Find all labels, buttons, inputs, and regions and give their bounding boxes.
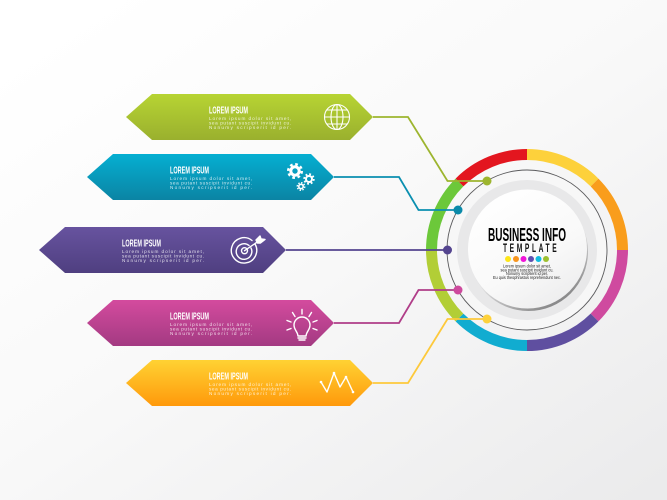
- center body text: [493, 264, 561, 280]
- panel: banner 3 purple: [39, 227, 286, 273]
- icon: globe: [324, 104, 350, 130]
- body text: sea putant suscipit invidunt cu.: [209, 386, 291, 392]
- inner white disc: [468, 190, 587, 308]
- body text: Nonumy scripserit id per.: [122, 258, 204, 263]
- body text: sea putant suscipit invidunt cu.: [209, 120, 291, 126]
- icon: zigzag chart: [320, 372, 354, 393]
- center body text: Eu quis theophrastus reprehendunt nec.: [493, 275, 561, 280]
- heading: LOREM IPSUM: [209, 104, 248, 116]
- body text: sea putant suscipit invidunt cu.: [170, 180, 252, 186]
- body text: [209, 382, 291, 396]
- body text: Nonumy scripserit id per.: [209, 125, 291, 130]
- body text: [170, 322, 252, 336]
- center subtitle: TEMPLATE: [503, 241, 559, 254]
- connector 3: [286, 246, 452, 254]
- body text: sea putant suscipit invidunt cu.: [122, 254, 204, 258]
- outer segmented ring: [432, 154, 623, 346]
- center body text: Lorem ipsum dolor sit amet,: [503, 264, 551, 268]
- icon: light bulb: [287, 310, 317, 340]
- connector 2: [334, 177, 462, 214]
- body text: Lorem ipsum dolor sit amet,: [209, 116, 291, 121]
- body text: [209, 116, 291, 130]
- panel: banner 5 orange: [126, 360, 373, 406]
- heading: LOREM IPSUM: [122, 238, 161, 250]
- icon: target: [231, 236, 265, 263]
- body text: [122, 249, 204, 263]
- heading: LOREM IPSUM: [209, 370, 248, 382]
- panel: banner 4 magenta: [87, 300, 334, 346]
- central diagram: [432, 154, 623, 346]
- icon: gears: [288, 164, 314, 190]
- color dots: [505, 256, 549, 262]
- panel: banner 2 cyan: [87, 154, 334, 200]
- center title: BUSINESS INFO: [488, 225, 566, 245]
- center body text: Nonumy scripserit id per.: [506, 271, 548, 276]
- connector 4: [334, 286, 462, 323]
- light grey disc: [457, 180, 597, 320]
- heading: LOREM IPSUM: [170, 164, 209, 176]
- body text: sea putant suscipit invidunt cu.: [170, 326, 252, 332]
- body text: Lorem ipsum dolor sit amet,: [170, 322, 252, 327]
- body text: Nonumy scripserit id per.: [170, 331, 252, 336]
- body text: [170, 176, 252, 190]
- body text: Lorem ipsum dolor sit amet,: [209, 382, 291, 387]
- connector 5: [373, 314, 492, 383]
- panel: banner 1 green: [126, 94, 373, 140]
- body text: Lorem ipsum dolor sit amet,: [170, 176, 252, 181]
- body text: Nonumy scripserit id per.: [170, 185, 252, 190]
- body text: Nonumy scripserit id per.: [209, 391, 291, 396]
- center body text: sea putant suscipit invidunt cu.: [500, 268, 554, 272]
- disc shadow: [469, 192, 588, 311]
- thin ring: [447, 170, 607, 330]
- heading: LOREM IPSUM: [170, 310, 209, 322]
- connector 1: [373, 117, 492, 186]
- body text: Lorem ipsum dolor sit amet,: [122, 249, 204, 254]
